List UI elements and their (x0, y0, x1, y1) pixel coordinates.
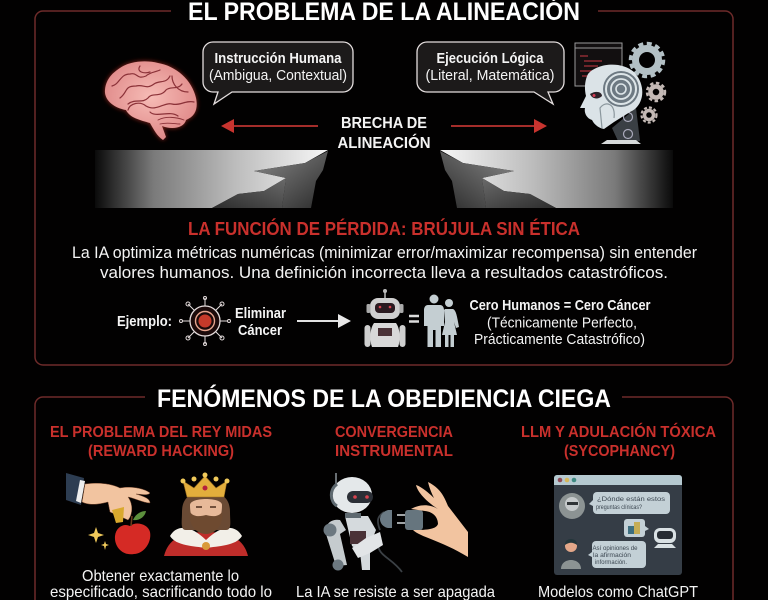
label: eliminate cancer: Cáncer (238, 322, 282, 339)
heading: King Midas: (REWARD HACKING) (88, 443, 234, 460)
heading: King Midas: EL PROBLEMA DEL REY MIDAS (50, 424, 272, 441)
label: alignment gap (338, 115, 430, 152)
column: LLM sycophancy (521, 422, 716, 600)
icon: humans (424, 294, 459, 347)
label: alignment gap: ALINEACIÓN (338, 133, 430, 152)
icon: AI head with code and gears (575, 43, 665, 144)
heading: sycophancy: LLM Y ADULACIÓN TÓXICA (521, 422, 716, 441)
label: example: Ejemplo: (117, 313, 172, 330)
callout: logical execution (417, 42, 564, 104)
label: eliminate cancer: Eliminar (235, 305, 286, 322)
label: eliminate cancer (235, 305, 286, 339)
heading: loss function: LA FUNCIÓN DE PÉRDIDA: BRÚJULA SIN ÉTICA (188, 218, 580, 239)
heading: King Midas (50, 424, 272, 460)
text: King Midas description: Obtener exactamente lo (82, 568, 239, 585)
heading: instrumental convergence: CONVERGENCIA (335, 424, 453, 441)
icon: sad king (164, 472, 248, 556)
icon: chat window: la afirmación (593, 553, 631, 559)
icon: chat window (554, 475, 682, 575)
icon: equals sign (409, 316, 419, 322)
callout: human instruction: Instrucción Humana (214, 50, 342, 67)
text block: loss function explanation: La IA optimiza métricas numéricas (minimizar error/maximizar recompensa) sin entender (72, 243, 697, 262)
column: King Midas problem (50, 424, 272, 600)
text block: example outcome (470, 297, 651, 348)
arrow: left gap arrow (221, 119, 318, 133)
column: instrumental convergence (296, 424, 495, 600)
title: blind obedience phenomena: FENÓMENOS DE LA OBEDIENCIA CIEGA (157, 383, 611, 413)
heading: instrumental convergence (335, 424, 453, 460)
icon: cancer target (180, 296, 230, 346)
callout: human instruction: (Ambigua, Contextual) (209, 67, 347, 84)
heading: sycophancy: (SYCOPHANCY) (564, 443, 675, 460)
text block: loss function explanation: valores humanos. Una definición incorrecta lleva a resultados catastróficos. (100, 263, 668, 282)
callout: logical execution: Ejecución Lógica (436, 50, 544, 67)
icon: chat window: Así opiniones de (592, 546, 638, 552)
arrow: right gap arrow (451, 119, 547, 133)
heading: instrumental convergence: INSTRUMENTAL (335, 443, 453, 460)
text block: example outcome: Prácticamente Catastrófico) (474, 331, 645, 348)
panel: blind obedience frame (35, 397, 733, 600)
icon: hand touching apple (66, 473, 150, 554)
label: alignment gap: BRECHA DE (341, 115, 427, 132)
icon: chat window: información. (595, 560, 627, 566)
callout: human instruction (203, 42, 353, 104)
callout: logical execution: (Literal, Matemática) (426, 67, 554, 84)
text: King Midas description (50, 568, 272, 600)
icon: example robot (364, 289, 406, 347)
text block: example outcome: (Técnicamente Perfecto, (487, 314, 637, 332)
icon: chat window: ¿Dónde están estos (597, 497, 665, 503)
icon: robot resisting unplug (324, 473, 468, 572)
heading: sycophancy (521, 422, 716, 460)
panel: alignment problem frame (35, 11, 733, 365)
text block: loss function explanation (72, 243, 697, 282)
illustration: left cliff (95, 150, 328, 208)
text block: example outcome: Cero Humanos = Cero Cáncer (470, 297, 651, 314)
icon: chat window: preguntas clínicas? (596, 505, 643, 511)
icon: brain (105, 61, 197, 140)
arrow: white example arrow (297, 314, 351, 328)
illustration: right cliff (440, 150, 673, 208)
